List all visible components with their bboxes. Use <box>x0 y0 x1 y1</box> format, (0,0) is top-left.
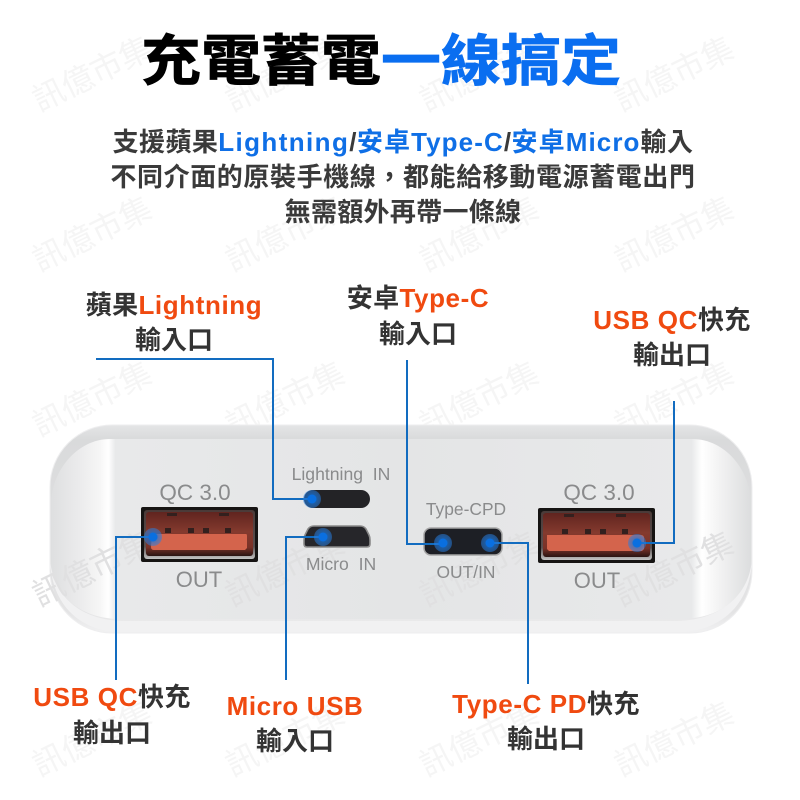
port printed labels: QC 3.0 <box>159 480 231 505</box>
Micro USB port <box>304 526 370 547</box>
watermark pattern: 訊億市集 <box>220 695 351 783</box>
label: Lightning input: 蘋果Lightning <box>86 290 262 320</box>
label: Micro USB input <box>227 691 363 756</box>
label: Lightning input <box>86 290 262 355</box>
device front face <box>51 439 751 619</box>
label: Type-C PD output: Type-C PD快充 <box>452 689 640 719</box>
label: Lightning input: 輸入口 <box>135 325 213 355</box>
watermark pattern: 訊億市集 <box>27 30 158 118</box>
watermark pattern: 訊億市集 <box>220 355 351 443</box>
port printed labels: OUT <box>574 568 620 593</box>
watermark pattern: 訊億市集 <box>414 355 545 443</box>
label: USB QC output left <box>33 682 191 748</box>
label: Type-C PD output: 輸出口 <box>507 724 585 754</box>
label: Micro USB input: Micro USB <box>227 691 363 721</box>
label: USB QC output right: 輸出口 <box>633 340 711 370</box>
watermark pattern: 訊億市集 <box>414 30 545 118</box>
port printed labels: QC 3.0 <box>563 480 635 505</box>
device outer shell <box>50 425 752 633</box>
label: Type-C input <box>347 283 489 349</box>
label: Micro USB input: 輸入口 <box>256 726 334 756</box>
label: USB QC output right <box>593 305 751 370</box>
label: USB QC output left: USB QC快充 <box>33 682 191 712</box>
port printed labels: Micro IN <box>306 554 376 574</box>
port printed labels: OUT <box>176 567 222 592</box>
Type-C port <box>424 528 502 555</box>
left USB port <box>141 507 258 562</box>
title: 充電蓄電一線搞定 <box>141 31 621 93</box>
label: Type-C input: 輸入口 <box>379 319 457 349</box>
Lightning port <box>304 490 370 508</box>
watermark over device: 訊億市集 <box>220 525 351 613</box>
watermark over device: 訊億市集 <box>609 525 740 613</box>
watermark pattern: 訊億市集 <box>609 695 740 783</box>
description text: 不同介面的原裝手機線，都能給移動電源蓄電出門 <box>110 162 696 192</box>
port printed labels: OUT/IN <box>437 562 495 582</box>
description text: 無需額外再帶一條線 <box>285 197 521 227</box>
watermark pattern: 訊億市集 <box>220 30 351 118</box>
description text <box>110 127 696 227</box>
watermark pattern: 訊億市集 <box>27 190 158 278</box>
power bank body <box>27 425 752 633</box>
watermark pattern: 訊億市集 <box>27 355 158 443</box>
port marker dots <box>144 490 646 552</box>
watermark pattern: 訊億市集 <box>609 190 740 278</box>
port printed labels: Lightning IN <box>292 464 390 484</box>
watermark over device: 訊億市集 <box>414 525 545 613</box>
label: USB QC output left: 輸出口 <box>73 718 151 748</box>
right USB port <box>538 508 655 563</box>
watermark pattern: 訊億市集 <box>609 355 740 443</box>
watermark pattern: 訊億市集 <box>27 695 158 783</box>
watermark over device <box>27 525 740 613</box>
label: USB QC output right: USB QC快充 <box>593 305 751 335</box>
label: Type-C input: 安卓Type-C <box>347 283 489 313</box>
description text: 支援蘋果Lightning/安卓Type-C/安卓Micro輸入 <box>113 127 693 157</box>
watermark pattern: 訊億市集 <box>220 190 351 278</box>
port printed labels <box>159 464 635 593</box>
connector lines <box>96 359 674 684</box>
port printed labels: Type-CPD <box>426 499 506 519</box>
watermark over device: 訊億市集 <box>27 525 158 613</box>
watermark pattern: 訊億市集 <box>414 190 545 278</box>
watermark pattern: 訊億市集 <box>414 695 545 783</box>
label: Type-C PD output <box>452 689 640 754</box>
watermark pattern: 訊億市集 <box>609 30 740 118</box>
